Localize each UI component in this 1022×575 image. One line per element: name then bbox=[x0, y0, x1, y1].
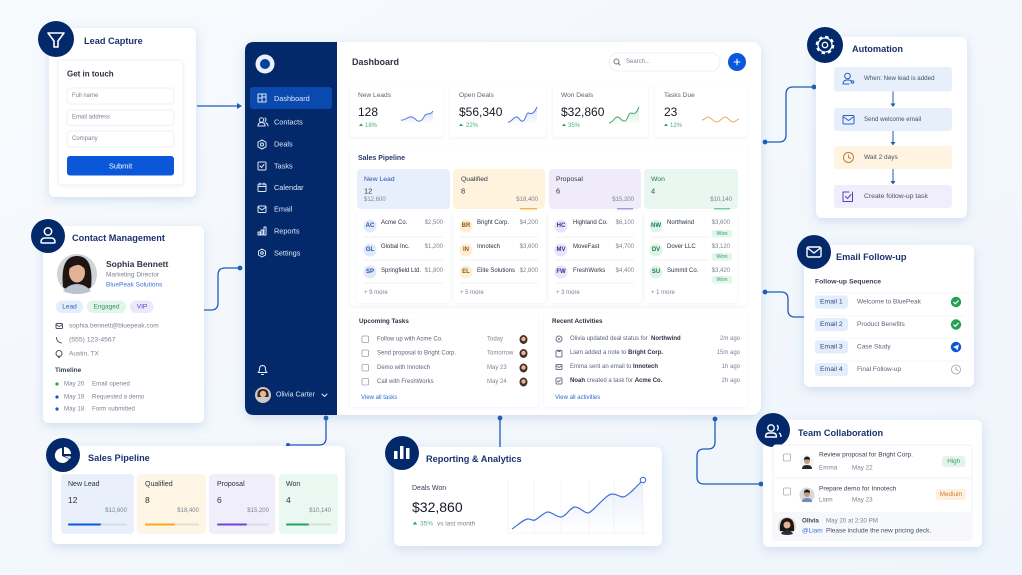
column: New Lead: AC bbox=[366, 223, 375, 229]
connector: team collaboration to dashboard bbox=[697, 417, 763, 486]
step: send email: Send welcome email bbox=[864, 116, 921, 123]
panel: lead capture: Lead Capture bbox=[84, 36, 143, 46]
photo: Sophia Bennett bbox=[57, 254, 97, 294]
search box bbox=[609, 53, 720, 71]
connector: email follow-up to dashboard bbox=[763, 290, 804, 317]
panel: reporting and analytics bbox=[385, 436, 662, 546]
user profile: Olivia Carter bbox=[276, 392, 316, 398]
activity row 1 bbox=[556, 336, 741, 342]
panel: team collaboration bbox=[756, 413, 982, 547]
user profile bbox=[255, 387, 327, 403]
column: Qualified: Bright Corp. bbox=[477, 220, 509, 226]
email 4 row bbox=[815, 363, 960, 376]
activity row 4: 2h ago bbox=[722, 378, 741, 384]
activity row 1: 2m ago bbox=[720, 336, 741, 342]
email 2 row bbox=[815, 318, 961, 331]
column: Qualified: BR bbox=[462, 223, 471, 229]
icon: logo bbox=[256, 54, 274, 74]
nav item: Calendar: Calendar bbox=[274, 183, 304, 192]
KPI: New Leads: 18% bbox=[365, 123, 378, 129]
column: Won: $3,120 bbox=[712, 244, 731, 250]
panel: sidebar bbox=[245, 42, 337, 415]
email 3 row bbox=[815, 340, 961, 354]
column: Qualified: EL bbox=[462, 269, 470, 275]
task row 2: Send proposal to Bright Corp. bbox=[377, 350, 456, 356]
column: New Lead: 12 bbox=[364, 186, 372, 196]
column: Proposal: MV bbox=[556, 247, 566, 253]
nav item: Calendar bbox=[258, 183, 304, 192]
icon: funnel bbox=[38, 21, 74, 57]
contact details bbox=[56, 322, 159, 358]
stage: Qualified: $18,400 bbox=[177, 508, 200, 514]
stage: Proposal: Proposal bbox=[217, 481, 245, 488]
email 2 row: Email 2 bbox=[820, 321, 843, 328]
stage: Qualified bbox=[137, 474, 206, 534]
task: prepare demo bbox=[784, 486, 966, 504]
panel: email follow-up bbox=[797, 235, 974, 387]
metric: deals won bbox=[412, 485, 476, 528]
task row 4: May 24 bbox=[487, 379, 507, 385]
column: Qualified: $18,400 bbox=[516, 197, 539, 203]
stage: New Lead: $12,600 bbox=[105, 508, 128, 514]
column: Proposal: Proposal bbox=[556, 176, 583, 183]
column: Qualified: 8 bbox=[461, 186, 465, 196]
KPI: Won Deals: Won Deals bbox=[561, 92, 594, 99]
KPI: New Leads: New Leads bbox=[358, 92, 392, 99]
activity row 2: Liam added a note to Bright Corp. bbox=[570, 350, 663, 356]
KPI: Tasks Due: 12% bbox=[670, 123, 683, 129]
comment: Please include the new pricing deck. bbox=[826, 528, 931, 534]
panel: team collaboration: Team Collaboration bbox=[798, 428, 883, 438]
KPI: Open Deals: Open Deals bbox=[459, 92, 495, 99]
step: create task bbox=[834, 185, 952, 208]
column: New Lead: $1,800 bbox=[425, 268, 444, 274]
nav item: Deals bbox=[258, 140, 293, 149]
task row 4: Call with FreshWorks bbox=[377, 379, 434, 385]
task: review proposal bbox=[784, 452, 966, 472]
comment: May 20 at 2:30 PM bbox=[826, 518, 878, 524]
nav item: Reports bbox=[258, 226, 300, 236]
add button bbox=[728, 53, 746, 71]
stage: Won: 4 bbox=[286, 495, 291, 505]
task row 2: Tomorrow bbox=[487, 350, 514, 356]
KPI: New Leads bbox=[350, 84, 443, 137]
column: Proposal: $6,100 bbox=[616, 220, 635, 226]
panel: sales pipeline bbox=[350, 147, 747, 306]
stage: Proposal bbox=[209, 474, 275, 534]
tags: VIP bbox=[137, 304, 147, 310]
column: Qualified: Elite Solutions bbox=[477, 268, 515, 274]
timeline: Form submitted bbox=[92, 406, 136, 412]
column: New Lead: SP bbox=[366, 269, 374, 275]
task: prepare demo: Liam bbox=[819, 496, 833, 504]
panel: automation: Automation bbox=[852, 44, 903, 54]
KPI: Open Deals: 22% bbox=[466, 123, 479, 129]
email 1 row bbox=[815, 296, 961, 308]
column: Proposal: $15,200 bbox=[612, 197, 635, 203]
activity row 1: Olivia updated deal status for Northwind bbox=[570, 336, 681, 342]
email 3 row: Email 3 bbox=[820, 344, 843, 350]
column: Won bbox=[644, 169, 738, 303]
stage: Qualified: Qualified bbox=[145, 481, 173, 488]
column: New Lead: New Lead bbox=[364, 176, 395, 183]
connector: contact management to dashboard bbox=[204, 266, 242, 310]
task row 3: Demo with Innotech bbox=[377, 365, 430, 371]
column: Qualified: $2,800 bbox=[520, 268, 539, 274]
column: Proposal: $4,700 bbox=[616, 244, 635, 250]
column: Proposal: 6 bbox=[556, 186, 560, 196]
nav item: Tasks bbox=[258, 162, 293, 170]
comment: Olivia bbox=[802, 518, 819, 524]
line chart bbox=[508, 477, 648, 533]
activity row 2: 15m ago bbox=[717, 350, 741, 356]
icon: team bbox=[756, 413, 790, 447]
panel: upcoming tasks: View all tasks bbox=[361, 395, 397, 401]
tags: Engaged bbox=[93, 304, 120, 310]
panel: recent activities: Recent Activities bbox=[552, 318, 603, 325]
stage: New Lead: New Lead bbox=[68, 481, 100, 488]
KPI: Open Deals: $56,340 bbox=[459, 105, 503, 119]
KPI: Tasks Due bbox=[655, 84, 747, 137]
task: prepare demo: Prepare demo for Innotech bbox=[819, 486, 897, 492]
lead form bbox=[58, 60, 183, 185]
column: Qualified: $3,600 bbox=[520, 244, 539, 250]
column: Won: Dover LLC bbox=[667, 244, 696, 250]
stage: New Lead bbox=[61, 474, 134, 534]
panel: sales pipeline: Sales Pipeline bbox=[358, 155, 405, 162]
column: Qualified bbox=[453, 169, 545, 303]
column: Proposal: HC bbox=[557, 223, 566, 229]
task row 3 bbox=[362, 364, 528, 372]
column: Qualified: $4,200 bbox=[520, 220, 539, 226]
step: send email bbox=[834, 108, 952, 131]
task row 3: May 23 bbox=[487, 365, 507, 371]
step: create task: Create follow-up task bbox=[864, 193, 928, 200]
icon: pie chart bbox=[46, 438, 80, 472]
column: New Lead: Acme Co. bbox=[381, 220, 408, 226]
activity row 2 bbox=[556, 350, 741, 357]
column: Qualified: + 5 more bbox=[460, 290, 485, 296]
email 1 row: Email 1 bbox=[820, 298, 843, 306]
lead form: Full name bbox=[72, 93, 99, 99]
stage: New Lead: 12 bbox=[68, 495, 78, 505]
nav item: Dashboard active bbox=[250, 87, 332, 109]
timeline: May 20 bbox=[64, 380, 85, 388]
nav item: Contacts: Contacts bbox=[274, 118, 303, 126]
column: New Lead: Global Inc. bbox=[381, 244, 410, 250]
column: Proposal bbox=[549, 169, 641, 303]
nav item: Settings: Settings bbox=[274, 248, 301, 258]
column: Won: SU bbox=[652, 269, 660, 275]
panel: dashboard window bbox=[245, 42, 761, 415]
column: Won: 4 bbox=[651, 186, 655, 196]
panel: contact management bbox=[31, 219, 204, 423]
email 4 row: Email 4 bbox=[820, 366, 843, 373]
KPI: New Leads: 128 bbox=[358, 105, 378, 119]
arrow bbox=[890, 169, 896, 184]
metric: deals won: vs last month bbox=[437, 520, 476, 528]
nav item: Email bbox=[258, 204, 293, 214]
connector: sales pipeline to dashboard bbox=[286, 416, 328, 447]
task row 4 bbox=[362, 378, 528, 386]
column: Won: $10,140 bbox=[710, 197, 733, 203]
column: New Lead: $1,200 bbox=[425, 244, 444, 250]
timeline bbox=[55, 367, 145, 412]
metric: deals won: Deals Won bbox=[412, 485, 446, 492]
step: trigger: When: New lead is added bbox=[864, 75, 935, 82]
timeline: Requested a demo bbox=[92, 394, 145, 400]
step: wait: Wait 2 days bbox=[864, 154, 898, 161]
connector: automation to dashboard bbox=[763, 85, 816, 144]
contact name bbox=[106, 259, 169, 288]
activity row 3: Emma sent an email to Innotech bbox=[570, 364, 658, 370]
nav item: Contacts bbox=[258, 118, 303, 126]
panel: contact management: Contact Management bbox=[72, 233, 165, 243]
column: Won: $3,600 bbox=[712, 220, 731, 226]
timeline: Timeline bbox=[55, 367, 82, 374]
icon: bell bbox=[258, 366, 267, 374]
stage: Proposal: $15,200 bbox=[247, 508, 270, 514]
nav item: Settings bbox=[258, 248, 301, 258]
task: review proposal: Emma bbox=[819, 464, 838, 472]
KPI: Won Deals: 35% bbox=[568, 123, 581, 129]
icon: envelope bbox=[797, 235, 831, 269]
timeline: Email opened bbox=[92, 380, 130, 388]
column: Qualified: IN bbox=[463, 247, 469, 253]
submit button: Submit bbox=[109, 162, 133, 170]
contact name: Sophia Bennett bbox=[106, 259, 169, 269]
column: New Lead bbox=[357, 169, 450, 303]
column: Won: Northwind bbox=[667, 220, 694, 226]
task: prepare demo: May 23 bbox=[852, 496, 873, 504]
panel: upcoming tasks: Upcoming Tasks bbox=[359, 318, 409, 325]
task row 2 bbox=[362, 349, 528, 358]
timeline: May 19 bbox=[64, 394, 85, 400]
timeline: May 18 bbox=[64, 406, 85, 412]
panel: recent activities: View all activities bbox=[555, 395, 600, 401]
column: Proposal: FW bbox=[556, 269, 566, 275]
column: Proposal: + 3 more bbox=[556, 290, 581, 296]
stage: Qualified: 8 bbox=[145, 495, 150, 505]
icon: gear bbox=[807, 27, 843, 63]
column: Won: $3,420 bbox=[712, 268, 731, 274]
connector: lead capture to dashboard bbox=[197, 103, 242, 109]
column: Qualified: Qualified bbox=[461, 176, 488, 183]
column: Won: Won bbox=[716, 231, 728, 237]
contact details: sophia.bennett@bluepeak.com bbox=[69, 322, 159, 330]
panel: email follow-up: Email Follow-up bbox=[836, 252, 907, 262]
lead form: Get in touch bbox=[67, 70, 114, 78]
task: review proposal: May 22 bbox=[852, 464, 873, 472]
arrow bbox=[890, 92, 896, 107]
KPI: Won Deals bbox=[553, 84, 648, 137]
task: prepare demo: Medium bbox=[940, 491, 962, 498]
KPI: Tasks Due: Tasks Due bbox=[664, 92, 695, 99]
activity row 4: Noah created a task for Acme Co. bbox=[570, 378, 663, 384]
heading: Dashboard: Dashboard bbox=[352, 57, 399, 67]
lead form: Company bbox=[72, 136, 98, 142]
nav item: Reports: Reports bbox=[274, 226, 300, 236]
panel: lead capture bbox=[38, 21, 196, 197]
contact details: Austin, TX bbox=[69, 350, 100, 358]
comment bbox=[774, 512, 971, 540]
column: Won: Won bbox=[716, 254, 728, 260]
column: Proposal: $4,400 bbox=[616, 268, 635, 274]
search box: Search... bbox=[626, 59, 650, 65]
stage: Won: Won bbox=[286, 481, 300, 488]
panel: sales pipeline summary bbox=[46, 438, 345, 544]
KPI: Won Deals: $32,860 bbox=[561, 105, 605, 119]
panel: email follow-up: Follow-up Sequence bbox=[815, 278, 881, 286]
email 1 row: Welcome to BluePeak bbox=[857, 298, 922, 306]
panel: sales pipeline summary: Sales Pipeline bbox=[88, 453, 150, 463]
column: Won: DV bbox=[652, 247, 660, 253]
contact details: (555) 123-4567 bbox=[69, 336, 116, 344]
column: Won: Won bbox=[716, 277, 728, 283]
KPI: Tasks Due: 23 bbox=[664, 105, 678, 119]
column: New Lead: $12,600 bbox=[364, 197, 386, 203]
panel: automation bbox=[807, 27, 967, 218]
stage: Proposal: 6 bbox=[217, 495, 222, 505]
task: review proposal: Review proposal for Bright Corp. bbox=[819, 452, 913, 458]
KPI: Open Deals bbox=[450, 84, 546, 137]
column: Proposal: MoveFast bbox=[573, 244, 600, 250]
column: Qualified: Innotech bbox=[477, 244, 500, 250]
column: New Lead: GL bbox=[366, 247, 374, 253]
nav item: Dashboard active: Dashboard bbox=[274, 94, 310, 103]
column: Proposal: Highland Co. bbox=[573, 220, 608, 226]
panel: reporting and analytics: Reporting & Analytics bbox=[426, 454, 522, 464]
contact name: Marketing Director bbox=[106, 272, 160, 278]
arrow bbox=[890, 131, 896, 146]
column: Won: Won bbox=[651, 176, 665, 183]
column: New Lead: $2,500 bbox=[425, 220, 444, 226]
column: Proposal: FreshWorks bbox=[573, 268, 605, 274]
contact name: BluePeak Solutions bbox=[106, 282, 163, 288]
activity row 3 bbox=[556, 364, 741, 370]
tags: Lead bbox=[62, 304, 77, 310]
column: Won: + 1 more bbox=[651, 290, 676, 296]
task list bbox=[773, 445, 972, 540]
step: trigger bbox=[834, 67, 952, 92]
icon: bar chart bbox=[385, 436, 419, 470]
nav item: Deals: Deals bbox=[274, 140, 293, 148]
column: New Lead: Springfield Ltd. bbox=[381, 268, 421, 274]
lead form: Email address bbox=[72, 114, 110, 120]
metric: deals won: $32,860 bbox=[412, 499, 463, 515]
task row 1: Follow up with Acme Co. bbox=[377, 336, 443, 342]
column: Won: Summit Co. bbox=[667, 268, 699, 274]
stage: Won bbox=[279, 474, 338, 534]
column: Won: NW bbox=[651, 223, 661, 229]
nav item: Tasks: Tasks bbox=[274, 162, 293, 170]
email 2 row: Product Benefits bbox=[857, 321, 905, 328]
tags bbox=[56, 300, 154, 313]
email 3 row: Case Study bbox=[857, 344, 891, 350]
task row 1: Today bbox=[487, 336, 503, 342]
activity row 3: 1h ago bbox=[722, 364, 741, 370]
email 4 row: Final Follow-up bbox=[857, 366, 901, 373]
panel: recent activities bbox=[544, 313, 747, 407]
comment: @Liam bbox=[802, 528, 823, 534]
panel: upcoming tasks bbox=[350, 313, 538, 407]
task row 1 bbox=[362, 335, 528, 344]
connector: reporting to dashboard bbox=[498, 416, 502, 447]
column: New Lead: + 9 more bbox=[364, 290, 389, 296]
task: review proposal: High bbox=[947, 458, 961, 465]
stage: Won: $10,140 bbox=[309, 508, 332, 514]
step: wait bbox=[834, 146, 952, 169]
metric: deals won: 35% bbox=[420, 520, 433, 528]
activity row 4 bbox=[556, 378, 741, 384]
icon: person bbox=[31, 219, 65, 253]
nav item: Email: Email bbox=[274, 204, 293, 214]
